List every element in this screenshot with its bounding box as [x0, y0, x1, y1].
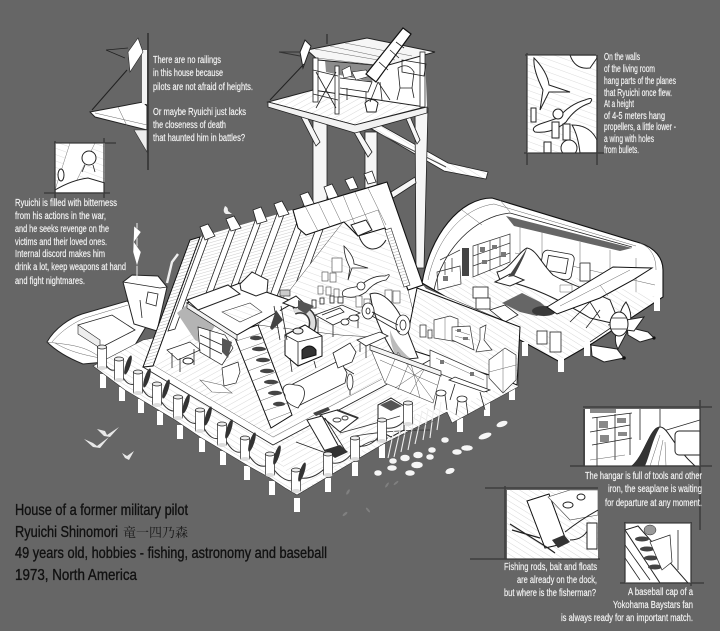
- callout: baseball cap inset: [561, 522, 704, 624]
- tower room: [268, 28, 435, 133]
- fishing rods: [340, 416, 430, 447]
- sketch frame: [620, 522, 704, 586]
- sketch frame: [524, 53, 604, 165]
- wind vane: [270, 34, 327, 100]
- reeds: [388, 402, 441, 458]
- roof skylight bands: [310, 232, 342, 275]
- callout text: victims and their loved ones.: [15, 237, 107, 248]
- callout text: that haunted him in battles?: [153, 133, 245, 144]
- barbecue: [378, 398, 404, 437]
- hangar back wall: [515, 225, 655, 295]
- callout text: and he seeks revenge on the: [15, 224, 109, 235]
- propeller: [619, 302, 631, 328]
- callout text: Fishing rods, bait and floats: [504, 562, 597, 573]
- house floor and walls: [143, 171, 520, 445]
- fish in the water: [342, 480, 399, 517]
- main deck and kitchen deck: [93, 287, 519, 495]
- hangar floor: [436, 262, 660, 361]
- callout: fishing dock inset: [470, 486, 600, 599]
- callout text: and fight nightmares.: [15, 276, 85, 287]
- rafters: [168, 197, 335, 331]
- perched gull: [224, 206, 232, 214]
- callout text: Yokohama Baystars fan: [613, 600, 693, 611]
- rafter tips: [200, 171, 376, 240]
- callout text: At a height: [604, 99, 634, 110]
- truss partition: [370, 345, 441, 403]
- barbecue and deck chair: [296, 398, 441, 458]
- callout text: [504, 562, 597, 599]
- inset picture: [527, 55, 597, 156]
- plane shadow: [532, 306, 556, 316]
- floor opening: [502, 293, 547, 316]
- bench: [357, 332, 388, 358]
- sketch frame: [470, 486, 600, 559]
- inset picture: [55, 143, 105, 193]
- title line 3: 49 years old, hobbies - fishing, astronomy and baseball: [15, 545, 327, 562]
- callout text: are already on the dock,: [517, 575, 597, 586]
- tower legs: [301, 108, 428, 268]
- callout: top-left railing inset: [90, 33, 253, 170]
- callout text: [604, 52, 676, 156]
- seaplane: [495, 248, 656, 362]
- title line 2: [15, 522, 188, 541]
- kitchen stools: [434, 377, 490, 415]
- callout: bitterness inset: [15, 138, 126, 287]
- fisherman's gear: [324, 445, 348, 458]
- title line 2: Ryuichi Shinomori: [15, 524, 118, 541]
- lily pads: [374, 419, 509, 476]
- wall propellers: [342, 246, 389, 297]
- callout text: in this house because: [153, 68, 223, 79]
- callout: wall propellers inset: [524, 52, 676, 165]
- sketch frame: [44, 138, 116, 198]
- hangar roof slit shadow: [506, 216, 632, 251]
- inset drawing: [90, 38, 147, 152]
- wheelhouse: [123, 275, 167, 331]
- hangar arch ribs: [434, 213, 632, 290]
- seagulls: [84, 427, 134, 460]
- inset picture: [625, 523, 691, 583]
- stove: [285, 310, 322, 372]
- stairs: [233, 325, 292, 428]
- callout text: [15, 198, 126, 287]
- callout text: the closeness of death: [153, 120, 226, 131]
- round window: [358, 232, 386, 249]
- cog wheels: [362, 303, 410, 335]
- callout text: pilots are not afraid of heights.: [153, 82, 253, 93]
- callout text: from his actions in the war,: [15, 211, 106, 222]
- inset picture: [585, 409, 703, 466]
- deck table: [320, 410, 358, 432]
- ropes: [103, 360, 408, 481]
- inset picture: [507, 490, 598, 559]
- mezzanine: [187, 272, 314, 340]
- floats: [591, 345, 624, 362]
- callout text: drink a lot, keep weapons at hand: [15, 262, 126, 273]
- callout text: from bullets.: [604, 145, 639, 156]
- shelves: [437, 234, 510, 290]
- hangar: [422, 198, 663, 362]
- callout text: [561, 587, 693, 624]
- kitchen back wall: [405, 288, 520, 385]
- callout text: There are no railings: [153, 55, 221, 66]
- wing on wall: [370, 293, 418, 360]
- crate and barrels: [473, 249, 590, 352]
- boat hatch: [78, 315, 135, 348]
- left roof beam: [143, 237, 200, 367]
- callout text: Ryuichi is filled with bitterness: [15, 198, 117, 209]
- callout text: On the walls: [604, 52, 640, 63]
- title block: [15, 502, 327, 584]
- callout text: [153, 55, 253, 144]
- deck support piles: [100, 297, 660, 512]
- deck chair: [296, 407, 345, 453]
- sketch frame line: [147, 33, 149, 170]
- living room table: [312, 296, 360, 337]
- roof gable cap: [293, 182, 423, 290]
- callout text: but where is the fisherman?: [504, 588, 596, 599]
- tower stairs: [360, 118, 488, 179]
- bottles: [420, 325, 432, 338]
- callout text: hang parts of the planes: [604, 76, 676, 87]
- dock posts and ropes: [98, 345, 412, 493]
- exhaust pipe: [167, 254, 178, 283]
- kitchen cabinets: [430, 316, 516, 393]
- kitchen corner below mezzanine: [167, 327, 240, 393]
- callout text: of 4-5 meters hang: [604, 111, 665, 122]
- sketch frame: [570, 400, 712, 530]
- callout text: a wing with holes: [604, 134, 654, 145]
- floor: [155, 300, 410, 438]
- picture frames: [318, 258, 400, 310]
- sofa: [283, 343, 356, 408]
- observation tower: [268, 28, 488, 268]
- boat: [47, 223, 178, 364]
- flag: [133, 223, 141, 280]
- callout: hangar inset: [570, 400, 712, 530]
- gable back wall: [258, 222, 420, 340]
- house silhouette: [143, 182, 505, 445]
- mezzanine shadow under: [177, 305, 215, 345]
- title line 1: House of a former military pilot: [15, 502, 188, 519]
- title line 2: 竜一四乃森: [123, 522, 188, 541]
- callout text: A baseball cap of a: [628, 587, 693, 598]
- callout text: of the living room: [604, 64, 655, 75]
- roof left slope: [168, 171, 376, 331]
- callout text: Internal discord makes him: [15, 249, 105, 260]
- callout text: [585, 471, 702, 509]
- callout text: Or maybe Ryuichi just lacks: [153, 107, 246, 118]
- hangar door: [462, 248, 469, 276]
- callout text: that Ryuichi once flew.: [604, 88, 672, 99]
- callout text: propellers, a little lower -: [604, 122, 676, 133]
- deck planks on right side: [275, 387, 430, 494]
- title line 4: 1973, North America: [15, 567, 137, 584]
